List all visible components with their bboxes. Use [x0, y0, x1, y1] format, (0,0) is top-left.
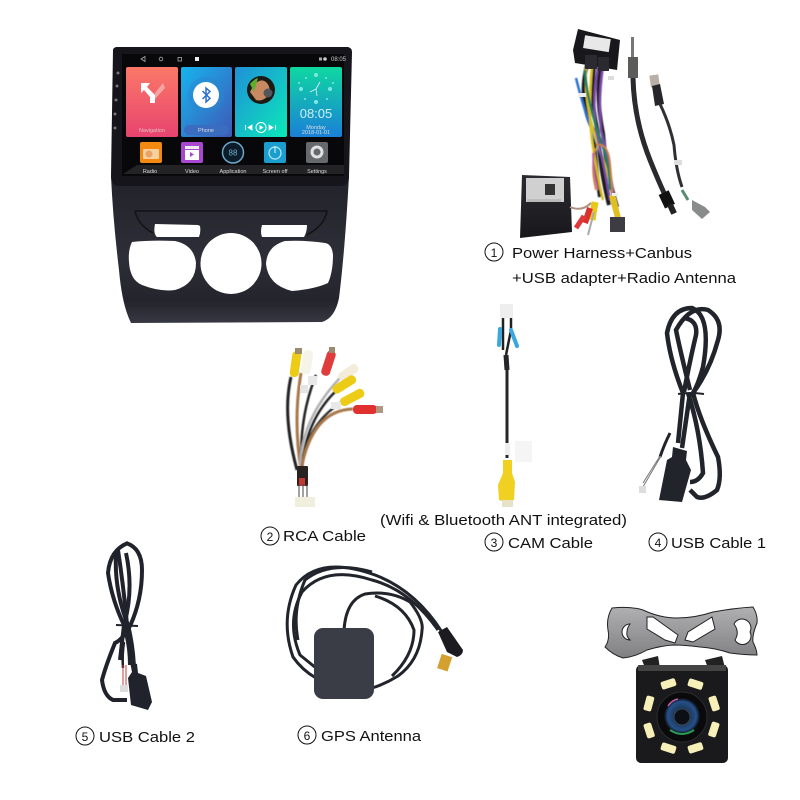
label 2 rca cable: RCA Cable — [283, 528, 366, 545]
bezel — [111, 47, 352, 186]
item rear view camera — [605, 607, 757, 763]
led lights — [643, 678, 720, 754]
icon: settings: Settings — [307, 169, 327, 175]
tile: clock — [290, 67, 342, 137]
tile: clock: 08:05 — [300, 106, 332, 121]
label 1 power harness: Power Harness+Canbus — [512, 245, 692, 262]
icon: settings — [306, 142, 328, 175]
head unit with dash panel — [111, 47, 352, 323]
icon: screen off — [263, 142, 288, 175]
icon: video: Video — [185, 169, 199, 175]
bezel buttons — [114, 72, 120, 130]
status bar — [141, 56, 347, 63]
label 3 cam cable: 3 — [491, 536, 498, 550]
label 3 cam cable — [485, 533, 593, 552]
tile: navigation: Navigation — [139, 128, 165, 134]
antenna cable — [631, 37, 634, 59]
wire bundle — [576, 65, 617, 207]
screen — [122, 54, 344, 176]
label 1 power harness: +USB adapter+Radio Antenna — [512, 270, 737, 287]
label 1 power harness: 1 — [491, 246, 498, 260]
icon: radio: Radio — [143, 169, 157, 175]
icon: screen off: Screen off — [263, 169, 288, 175]
item 5 usb cable 2 — [102, 543, 152, 710]
status bar: 08:05 — [331, 57, 347, 63]
item 4 usb cable 1 — [639, 308, 720, 502]
icon: video — [181, 142, 203, 175]
label 4 usb cable 1: 4 — [655, 536, 662, 550]
tile: clock: 2018-01-01 — [302, 130, 330, 136]
label 4 usb cable 1: USB Cable 1 — [671, 535, 766, 552]
label 5 usb cable 2: 5 — [82, 730, 89, 744]
icon: application: Application — [220, 169, 246, 175]
item 1 harness set — [520, 29, 710, 238]
label 1 power harness — [485, 243, 737, 287]
icon: application: 88 — [229, 148, 238, 158]
label 6 gps antenna — [298, 726, 422, 745]
lens — [657, 692, 707, 742]
icon: radio — [140, 142, 162, 175]
item 3 cam cable — [498, 304, 532, 507]
tile: music — [235, 67, 287, 137]
label 3 cam cable: CAM Cable — [508, 535, 593, 552]
connector block — [573, 29, 620, 70]
tile: phone — [181, 67, 232, 137]
mounting plate — [605, 607, 757, 658]
usb adapter cable — [649, 74, 660, 87]
label 6 gps antenna: 6 — [304, 729, 311, 743]
item 6 gps antenna — [287, 567, 463, 699]
item 2 rca cable — [288, 347, 383, 507]
tile: navigation — [126, 67, 178, 137]
note wifi and bluetooth: (Wifi & Bluetooth ANT integrated) — [380, 512, 627, 529]
icon: application — [220, 142, 246, 175]
canbus box — [520, 175, 572, 238]
tile: phone: Phone — [198, 128, 214, 134]
label 2 rca cable — [261, 527, 366, 545]
tile: clock: Monday — [306, 125, 326, 131]
label 5 usb cable 2: USB Cable 2 — [99, 729, 195, 746]
label 5 usb cable 2 — [76, 727, 195, 746]
label 4 usb cable 1 — [649, 533, 766, 552]
dash panel — [111, 176, 349, 323]
label 6 gps antenna: GPS Antenna — [321, 728, 422, 745]
camera body — [636, 665, 728, 763]
label 2 rca cable: 2 — [267, 530, 274, 544]
rca and plugs — [570, 203, 591, 209]
